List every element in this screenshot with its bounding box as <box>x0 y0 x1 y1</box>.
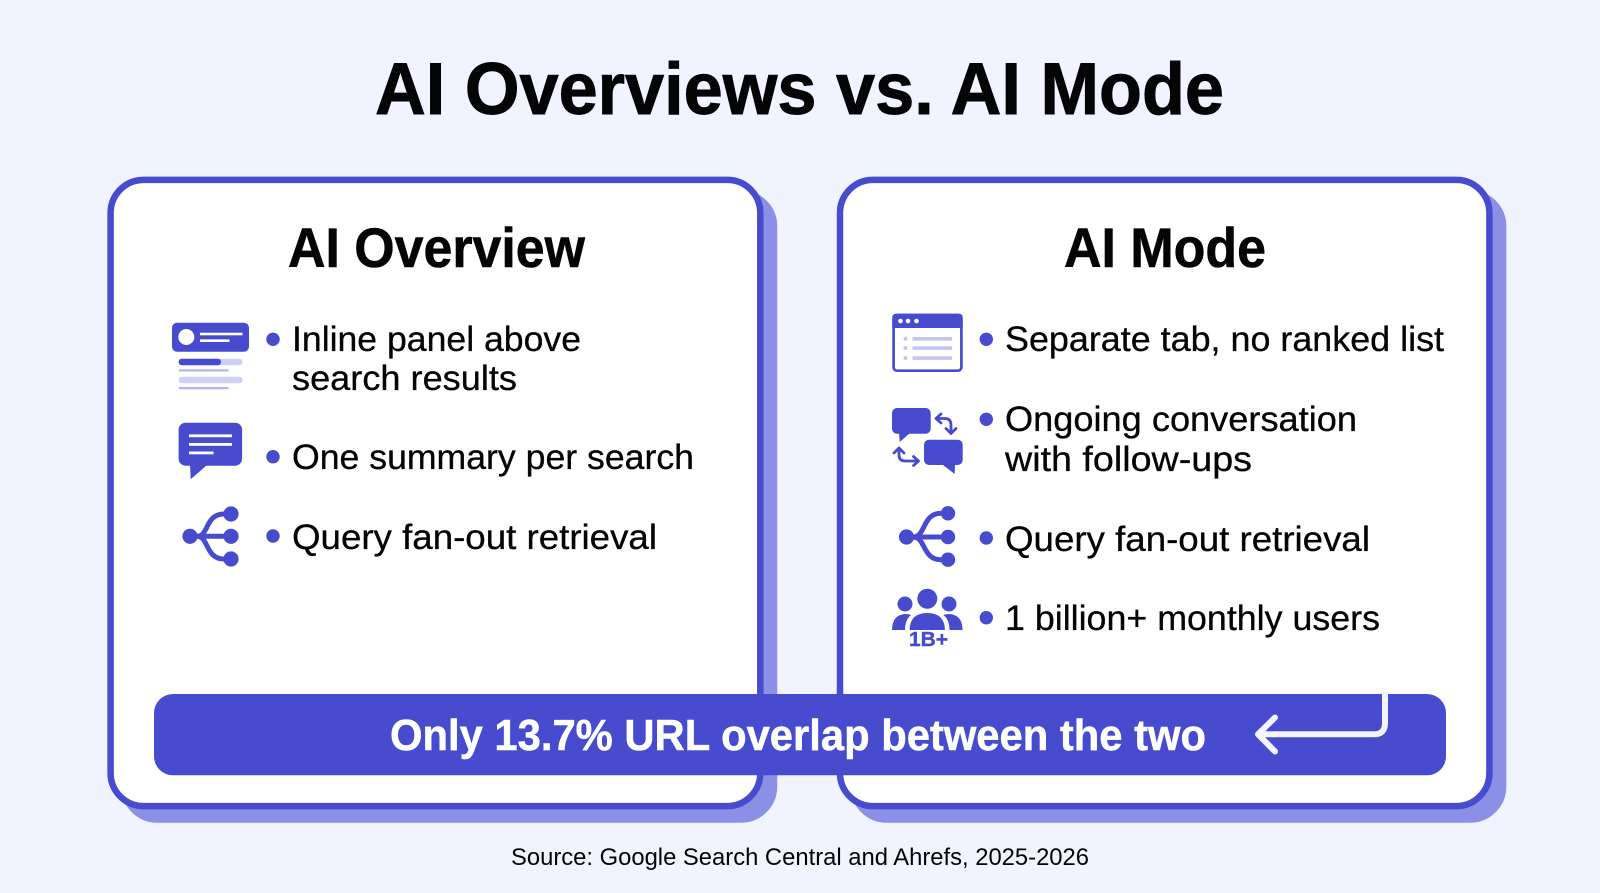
bullet: Inline panel above search results: Inline panel above <box>292 320 581 359</box>
icon: inline panel <box>172 323 249 389</box>
panel: AI Overview <box>111 180 774 819</box>
bullet: Inline panel above search results <box>266 320 581 398</box>
callout band: URL overlap <box>154 694 1446 775</box>
bullet: Separate tab, no ranked list: Separate tab, no ranked list <box>1005 320 1444 359</box>
callout band: URL overlap: Only 13.7% URL overlap between the two <box>390 711 1206 760</box>
heading: AI Overview: AI Overview <box>288 216 585 279</box>
bullet: Query fan-out retrieval: Query fan-out retrieval <box>1005 520 1370 559</box>
bullet: Inline panel above search results: search results <box>292 359 517 398</box>
panel: AI Mode <box>840 180 1503 819</box>
icon: 1B+ users <box>892 589 962 651</box>
icon: summary speech bubble <box>179 423 242 479</box>
icon: query fan-out <box>182 506 239 567</box>
bullet: One summary per search: One summary per search <box>292 438 694 477</box>
icon: conversation bubbles <box>892 408 963 474</box>
icon: 1B+ users: 1B+ <box>909 629 948 651</box>
bullet: Query fan-out retrieval: Query fan-out retrieval <box>292 518 657 557</box>
source note: Source: Google Search Central and Ahrefs, 2025-2026 <box>511 844 1089 871</box>
bullet: Ongoing conversation with follow-ups: with follow-ups <box>1004 440 1252 479</box>
bullet: Ongoing conversation with follow-ups: Ongoing conversation <box>1005 400 1357 439</box>
title: AI Overviews vs. AI Mode <box>375 49 1224 130</box>
heading: AI Mode: AI Mode <box>1064 216 1266 279</box>
icon: browser window <box>892 314 963 371</box>
bullet: 1 billion+ monthly users: 1 billion+ monthly users <box>1005 599 1380 638</box>
arrow: return arrow <box>1258 694 1385 752</box>
bullet: Ongoing conversation with follow-ups <box>980 400 1357 479</box>
icon: query fan-out <box>899 506 955 567</box>
